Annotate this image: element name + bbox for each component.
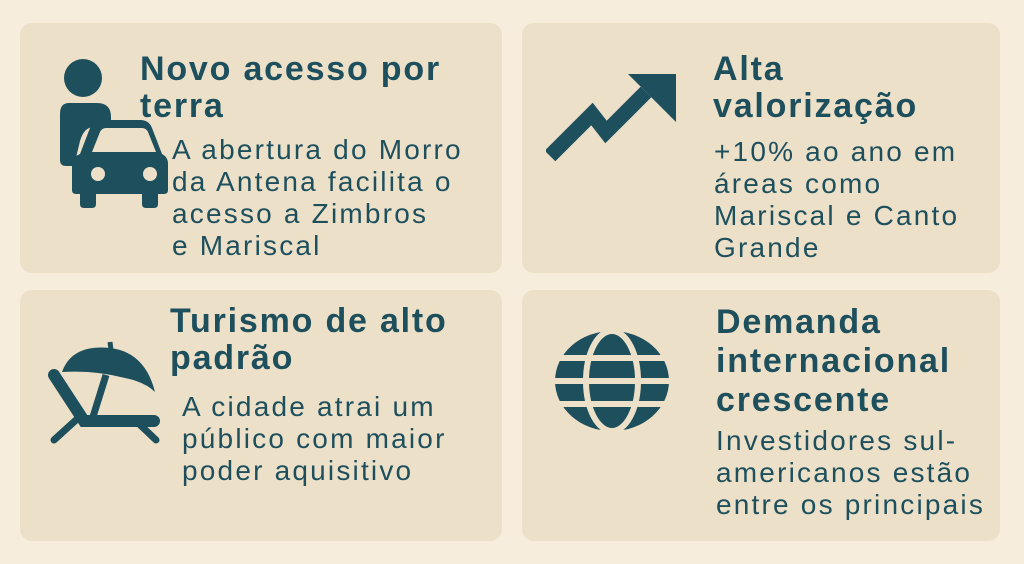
panel: novo acesso	[20, 23, 502, 273]
panel: turismo	[20, 290, 502, 541]
heading	[716, 303, 951, 419]
icon: rising arrow	[546, 74, 676, 162]
text	[172, 134, 463, 261]
heading: Turismo de alto	[170, 302, 448, 340]
panel: demanda internacional	[522, 290, 1000, 541]
text: poder aquisitivo	[182, 455, 413, 486]
text: A abertura do Morro	[172, 134, 463, 165]
text: Grande	[714, 232, 821, 263]
text: Mariscal e Canto	[714, 200, 959, 231]
text: acesso a Zimbros	[172, 198, 428, 229]
text: Investidores sul-	[716, 425, 957, 456]
heading: Novo acesso por	[140, 50, 441, 88]
heading: padrão	[170, 339, 294, 377]
icon: person with car	[60, 59, 168, 208]
icon: beach chair umbrella	[48, 342, 160, 444]
heading: internacional	[716, 342, 951, 380]
text: da Antena facilita o	[172, 166, 453, 197]
heading: Demanda	[716, 303, 882, 341]
text: entre os principais	[716, 489, 985, 520]
text: público com maior	[182, 423, 447, 454]
text: A cidade atrai um	[182, 391, 436, 422]
text: +10% ao ano em	[714, 136, 957, 167]
text	[716, 425, 985, 520]
text	[182, 391, 447, 486]
heading: crescente	[716, 381, 891, 419]
text: e Mariscal	[172, 230, 322, 261]
heading	[713, 50, 918, 125]
text	[714, 136, 959, 263]
heading: valorização	[713, 87, 918, 125]
heading	[170, 302, 448, 377]
heading: Alta	[713, 50, 784, 88]
heading: terra	[140, 87, 225, 125]
heading	[140, 50, 441, 125]
text: americanos estão	[716, 457, 972, 488]
text: áreas como	[714, 168, 882, 199]
panel: alta valorizacao	[522, 23, 1000, 273]
icon: globe	[555, 332, 669, 430]
